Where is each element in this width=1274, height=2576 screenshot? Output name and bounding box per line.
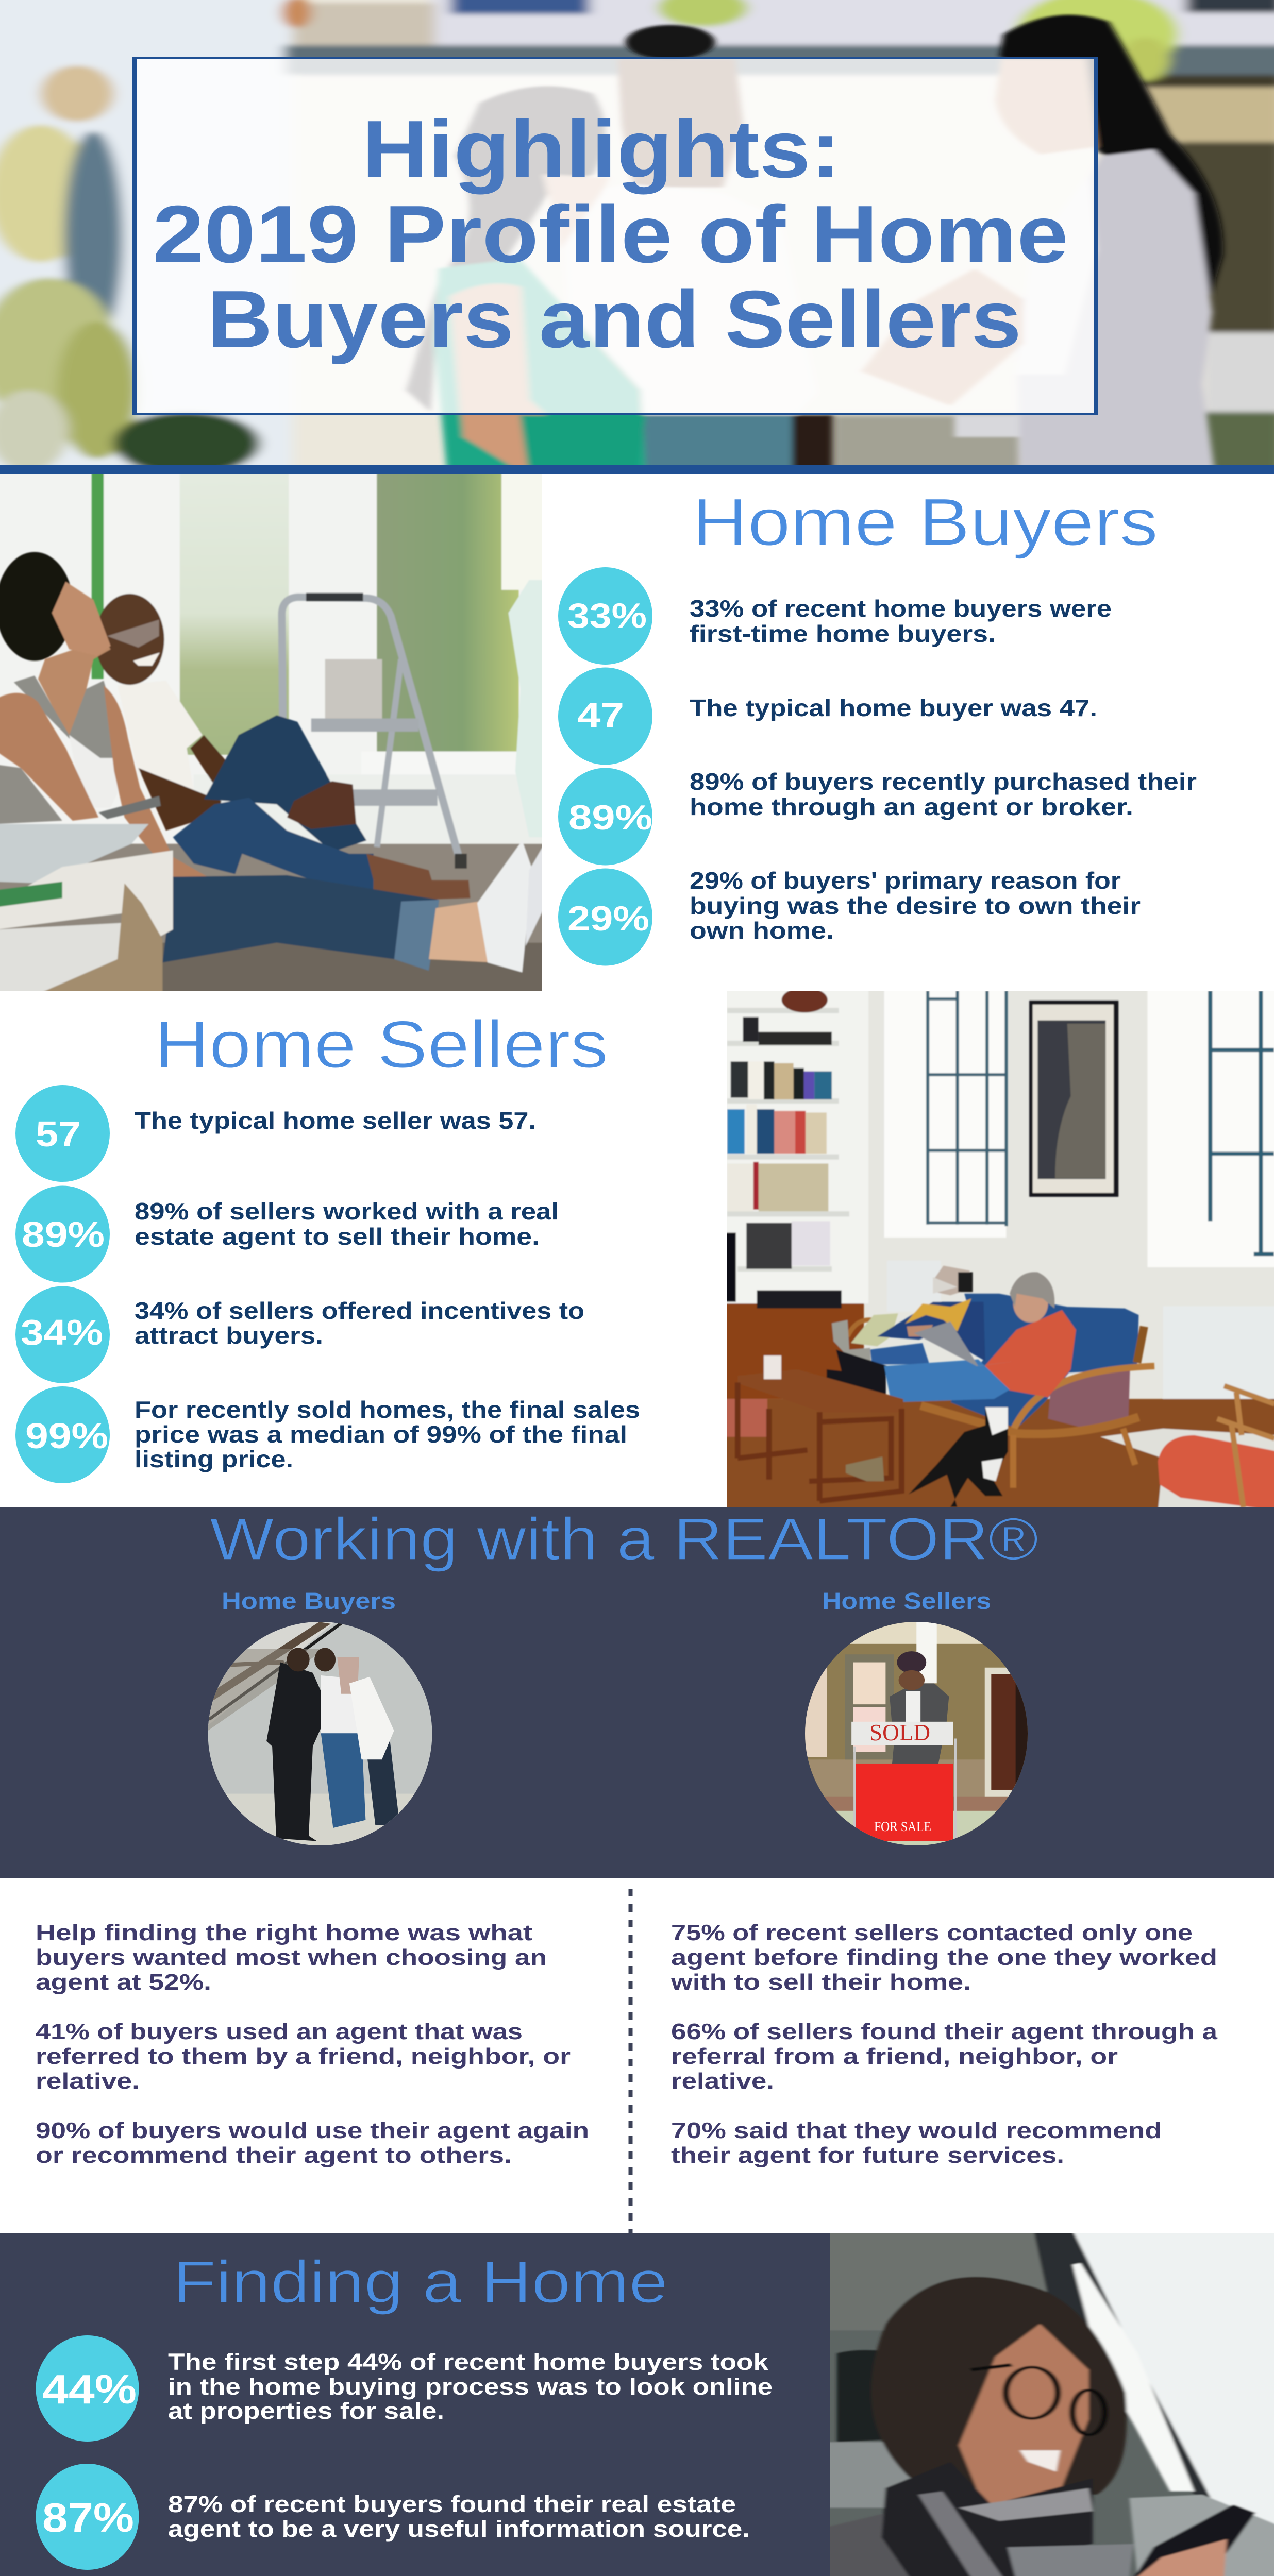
- stat: 29%: [558, 869, 652, 965]
- text: real estate agent: [135, 1198, 559, 1250]
- text: first-time buyers: 33% of recent home buyers were: [690, 595, 1112, 622]
- cat: [909, 1407, 1008, 1507]
- coffee table: [737, 1369, 903, 1412]
- photo: agent with sold sign: SOLD: [869, 1719, 930, 1745]
- text: primary reason: 29% of buyers' primary reason for: [690, 867, 1121, 894]
- stat: 47: [558, 668, 652, 765]
- photo: couple sitting on floor with ladder: [0, 471, 546, 995]
- text: primary reason: [690, 867, 1141, 944]
- text: useful source: agent to be a very useful information source.: [168, 2516, 750, 2542]
- subheading: home buyers: Home Buyers: [222, 1588, 396, 1614]
- photo: agent with sold sign: [800, 1620, 1040, 1848]
- point: referred agent: [36, 2019, 571, 2094]
- man: [118, 681, 203, 801]
- radiators: [887, 1261, 941, 1312]
- point: contacted one agent: 75% of recent sellers contacted only one: [671, 1920, 1193, 1945]
- stat: 99%: 99%: [25, 1416, 108, 1456]
- text: look online: The first step 44% of recent home buyers took: [168, 2349, 769, 2375]
- photo: couple relaxing on sofa in living room: [724, 988, 1274, 1511]
- text: look online: in the home buying process was to look online: [168, 2374, 773, 2400]
- point: referred agent: referred to them by a friend, neighbor, or: [36, 2044, 571, 2069]
- stat: 89%: 89%: [568, 798, 652, 837]
- text: final sales price: listing price.: [135, 1446, 293, 1472]
- stat: 57: 57: [36, 1114, 81, 1154]
- stat: 33%: [558, 567, 652, 665]
- subheading: home sellers: Home Sellers: [822, 1588, 991, 1614]
- point: referral: [671, 2019, 1218, 2094]
- heading: Working with a REALTOR®: [210, 1505, 1038, 1572]
- point: recommend agent: [671, 2118, 1162, 2168]
- sofa: [950, 1294, 1139, 1429]
- text: incentives: 34% of sellers offered incentives to: [135, 1297, 584, 1324]
- stat: 87%: 87%: [42, 2495, 134, 2540]
- photo: agent with sold sign: FOR SALE: [874, 1819, 931, 1834]
- text: agent or broker: home through an agent or broker.: [690, 793, 1133, 820]
- shelves: [727, 1010, 849, 1269]
- stat: 89%: 89%: [22, 1214, 105, 1255]
- stat: 34%: [15, 1286, 110, 1383]
- text: incentives: attract buyers.: [135, 1322, 323, 1349]
- stat: 44%: [36, 2335, 139, 2442]
- panel: finding a home: [0, 2233, 1274, 2576]
- stat: 87%: [36, 2464, 139, 2570]
- text: primary reason: own home.: [690, 917, 834, 944]
- paint tray, handle, tape, box: [98, 796, 161, 819]
- point: recommend agent: their agent for future services.: [671, 2143, 1064, 2168]
- text: typical seller: The typical home seller was 57.: [135, 1107, 536, 1134]
- drop cloth: [508, 580, 546, 837]
- ladder: [282, 597, 462, 867]
- stat: 89%: [558, 768, 652, 866]
- text: primary reason: buying was the desire to own their: [690, 892, 1141, 919]
- floor, rug: [724, 1399, 1274, 1511]
- text: first-time buyers: [690, 595, 1112, 647]
- point: referred agent: 41% of buyers used an agent that was: [36, 2019, 523, 2044]
- point: use agent again: 90% of buyers would use their agent again: [36, 2118, 589, 2143]
- sideboard: [724, 1303, 864, 1399]
- stat: 44%: 44%: [42, 2366, 137, 2412]
- point: recommend agent: 70% said that they would recommend: [671, 2118, 1162, 2143]
- point: help finding home: Help finding the right home was what: [36, 1920, 532, 1945]
- text: useful source: 87% of recent buyers found their real estate: [168, 2491, 736, 2517]
- point: help finding home: agent at 52%.: [36, 1970, 211, 1995]
- text: look online: at properties for sale.: [168, 2398, 444, 2424]
- heading: Home Sellers: [155, 1007, 608, 1082]
- text: agent or broker: [690, 768, 1197, 820]
- text: real estate agent: 89% of sellers worked with a real: [135, 1198, 559, 1225]
- point: referral: 66% of sellers found their agent through a: [671, 2019, 1218, 2044]
- blue divider band: [0, 465, 1274, 474]
- point: referral: relative.: [671, 2069, 774, 2094]
- stat: 57: [15, 1085, 110, 1182]
- text: real estate agent: estate agent to sell their home.: [135, 1223, 540, 1250]
- text: final sales price: price was a median of 99% of the final: [135, 1421, 627, 1448]
- column: home sellers points: [670, 1920, 1218, 2168]
- title: Buyers and Sellers: [207, 274, 1021, 365]
- woman right: [999, 15, 1223, 297]
- text: final sales price: For recently sold homes, the final sales: [135, 1396, 640, 1423]
- man: [626, 25, 715, 59]
- text: useful source: [168, 2491, 750, 2542]
- column: home buyers points: [36, 1920, 589, 2168]
- text: look online: [168, 2349, 773, 2424]
- text: final sales price: [135, 1396, 640, 1472]
- text: agent or broker: 89% of buyers recently purchased their: [690, 768, 1197, 795]
- panel: home buyers: [558, 484, 1197, 965]
- man: [851, 1313, 898, 1346]
- point: use agent again: or recommend their agent to others.: [36, 2143, 512, 2168]
- point: use agent again: [36, 2118, 589, 2168]
- heading: Finding a Home: [173, 2248, 668, 2315]
- point: contacted one agent: with to sell their home.: [670, 1970, 971, 1995]
- column divider: [629, 1889, 633, 2233]
- point: referred agent: relative.: [36, 2069, 140, 2094]
- stat: 33%: 33%: [567, 596, 647, 635]
- hero photo: agent talking with couple: [0, 0, 1274, 474]
- woman: [38, 639, 111, 738]
- photo: woman with phone in car: [825, 2230, 1274, 2576]
- stat: 89%: [15, 1186, 110, 1283]
- text: incentives: [135, 1297, 584, 1349]
- stat: 99%: [15, 1386, 110, 1483]
- woman left: [406, 86, 605, 412]
- woman: [982, 1310, 1076, 1397]
- text: typical buyer: The typical home buyer was 47.: [690, 694, 1097, 721]
- title: Highlights:: [362, 104, 841, 195]
- photo: agent with buyers: [208, 1620, 435, 1846]
- stat: 47: 47: [577, 696, 624, 735]
- point: help finding home: [36, 1920, 547, 1995]
- stat: 34%: 34%: [21, 1312, 103, 1352]
- panel: working with a REALTOR: [0, 1505, 1274, 1878]
- point: help finding home: buyers wanted most when choosing an: [36, 1945, 547, 1970]
- title box: [132, 57, 1098, 415]
- point: referral: referral from a friend, neighbor, or: [671, 2044, 1118, 2069]
- text: first-time buyers: first-time home buyers.: [690, 620, 996, 647]
- stat: 29%: 29%: [567, 899, 649, 938]
- point: contacted one agent: agent before finding the one they worked: [671, 1945, 1217, 1970]
- heading: Home Buyers: [692, 484, 1158, 560]
- title: 2019 Profile of Home: [153, 189, 1068, 280]
- title: [153, 104, 1068, 365]
- woman's jeans: [162, 875, 439, 971]
- point: contacted one agent: [670, 1920, 1217, 1995]
- panel: home sellers: [15, 1007, 640, 1483]
